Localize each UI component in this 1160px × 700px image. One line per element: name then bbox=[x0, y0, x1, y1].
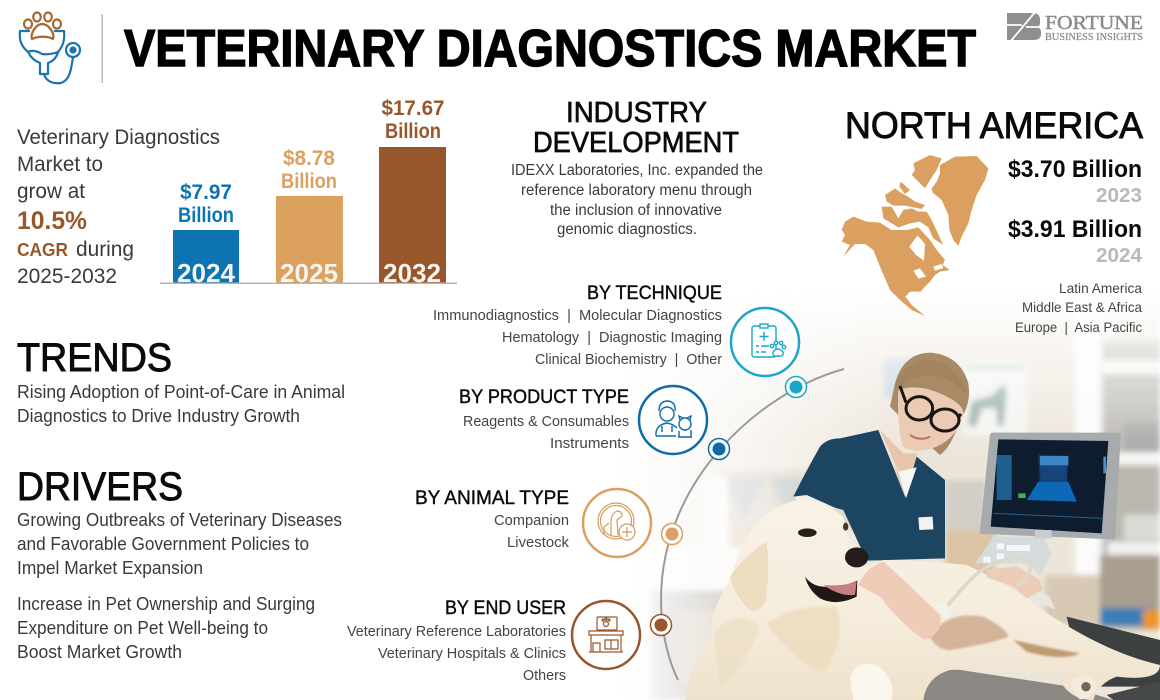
market values: $3.91 Billion bbox=[1008, 216, 1142, 243]
icon: end user circle bbox=[572, 601, 640, 669]
forearm bbox=[858, 562, 941, 640]
trends bbox=[17, 336, 345, 426]
bar chart: 2024 bbox=[177, 258, 236, 288]
segment: by product type: Instruments bbox=[550, 436, 629, 452]
CAGR text block: 2025-2032 bbox=[17, 265, 117, 288]
market values: 2024 bbox=[1096, 245, 1143, 267]
industry development: genomic diagnostics. bbox=[557, 221, 697, 238]
dog face bbox=[798, 528, 817, 537]
brand logo: Fortune Business Insights: FORTUNE bbox=[1045, 12, 1143, 34]
segment: by end user: BY END USER bbox=[445, 598, 566, 619]
dog belly patch bbox=[930, 615, 1008, 650]
bar chart: $7.97 bbox=[180, 181, 232, 204]
veterinarian bbox=[793, 353, 969, 561]
industry development: INDUSTRY bbox=[566, 97, 707, 129]
other regions bbox=[1015, 280, 1142, 335]
bar chart: $17.67 bbox=[382, 97, 444, 120]
timeline marker: product type bbox=[708, 438, 730, 460]
segment: by end user: Veterinary Reference Laboratories bbox=[347, 624, 566, 640]
bar chart: Billion bbox=[281, 170, 337, 193]
segment: by animal type: Companion bbox=[494, 513, 569, 529]
timeline marker: animal type bbox=[662, 524, 682, 544]
icon: animal type circle bbox=[583, 489, 651, 557]
CAGR text block: CAGR bbox=[17, 239, 68, 260]
map: North America bbox=[842, 155, 988, 316]
segment: by technique: Clinical Biochemistry | Other bbox=[535, 352, 722, 368]
industry development: the inclusion of innovative bbox=[550, 202, 722, 219]
drivers: DRIVERS bbox=[17, 465, 183, 509]
market values: $3.70 Billion bbox=[1008, 156, 1142, 183]
brand logo: Fortune Business Insights bbox=[1007, 11, 1143, 43]
dog bbox=[685, 500, 1160, 700]
timeline arc bbox=[661, 369, 844, 680]
segment: by animal type bbox=[415, 488, 570, 551]
bar chart: Billion bbox=[385, 120, 441, 143]
dog chest shadow bbox=[767, 606, 840, 673]
timeline marker: end user bbox=[650, 614, 672, 636]
market values: 2023 bbox=[1096, 185, 1142, 207]
segment: by product type: BY PRODUCT TYPE bbox=[459, 387, 629, 408]
segment: by technique: Hematology | Diagnostic Imaging bbox=[502, 330, 722, 346]
segment: by technique bbox=[433, 283, 722, 368]
industry development: DEVELOPMENT bbox=[533, 127, 739, 159]
bar chart: Billion bbox=[178, 204, 234, 227]
trends: Rising Adoption of Point-of-Care in Animal bbox=[17, 382, 345, 402]
drivers: and Favorable Government Policies to bbox=[17, 534, 309, 554]
segment: by technique: BY TECHNIQUE bbox=[587, 283, 722, 304]
CAGR text block: grow at bbox=[17, 180, 85, 203]
dog rear paw bbox=[1072, 676, 1097, 699]
segment: by end user: Others bbox=[523, 668, 566, 684]
icon: technique circle bbox=[731, 308, 799, 376]
CAGR text block: during bbox=[76, 238, 134, 261]
CAGR text block bbox=[17, 126, 220, 288]
industry development: IDEXX Laboratories, Inc. expanded the bbox=[511, 162, 763, 179]
icon: product type circle bbox=[639, 386, 707, 454]
segment: by animal type: BY ANIMAL TYPE bbox=[415, 488, 569, 509]
north america heading: NORTH AMERICA bbox=[845, 105, 1143, 146]
industry development: reference laboratory menu through bbox=[521, 182, 752, 199]
bar chart: 2025 bbox=[280, 258, 338, 288]
probe cable bbox=[947, 558, 1031, 607]
drivers: Impel Market Expansion bbox=[17, 558, 203, 578]
drivers: Growing Outbreaks of Veterinary Diseases bbox=[17, 510, 342, 530]
ultrasound monitor bbox=[980, 433, 1121, 539]
segment: by end user: Veterinary Hospitals & Clinics bbox=[378, 646, 566, 662]
other regions: Latin America bbox=[1059, 280, 1142, 296]
timeline marker: technique bbox=[786, 376, 806, 398]
CAGR text block: Veterinary Diagnostics bbox=[17, 126, 220, 149]
trends: TRENDS bbox=[17, 336, 172, 380]
bar chart: 2032 bbox=[383, 258, 441, 288]
other regions: Europe | Asia Pacific bbox=[1015, 319, 1142, 335]
industry development bbox=[511, 97, 763, 238]
dog front paw bbox=[850, 664, 893, 700]
brand logo: Fortune Business Insights: BUSINESS INSIGHTS bbox=[1045, 32, 1143, 43]
title: VETERINARY DIAGNOSTICS MARKET bbox=[124, 20, 976, 78]
other regions: Middle East & Africa bbox=[1022, 299, 1142, 315]
segment: by animal type: Livestock bbox=[507, 535, 570, 551]
logo icon: paw and stethoscope bbox=[20, 12, 80, 83]
bar chart: $8.78 bbox=[283, 147, 335, 170]
drivers: Expenditure on Pet Well-being to bbox=[17, 618, 268, 638]
segment: by product type bbox=[459, 387, 629, 452]
segment: by technique: Immunodiagnostics | Molecular Diagnostics bbox=[433, 308, 722, 324]
drivers: Boost Market Growth bbox=[17, 642, 182, 662]
segment: by end user bbox=[347, 598, 566, 684]
drivers: Increase in Pet Ownership and Surging bbox=[17, 594, 315, 614]
CAGR text block: Market to bbox=[17, 153, 103, 176]
CAGR text block: 10.5% bbox=[17, 207, 87, 235]
bar chart bbox=[160, 97, 457, 288]
trends: Diagnostics to Drive Industry Growth bbox=[17, 406, 300, 426]
market values bbox=[1008, 156, 1143, 267]
segment: by product type: Reagents & Consumables bbox=[463, 414, 629, 430]
table and equipment bbox=[723, 537, 1160, 700]
dog ear bbox=[730, 542, 768, 611]
drivers bbox=[17, 465, 342, 662]
